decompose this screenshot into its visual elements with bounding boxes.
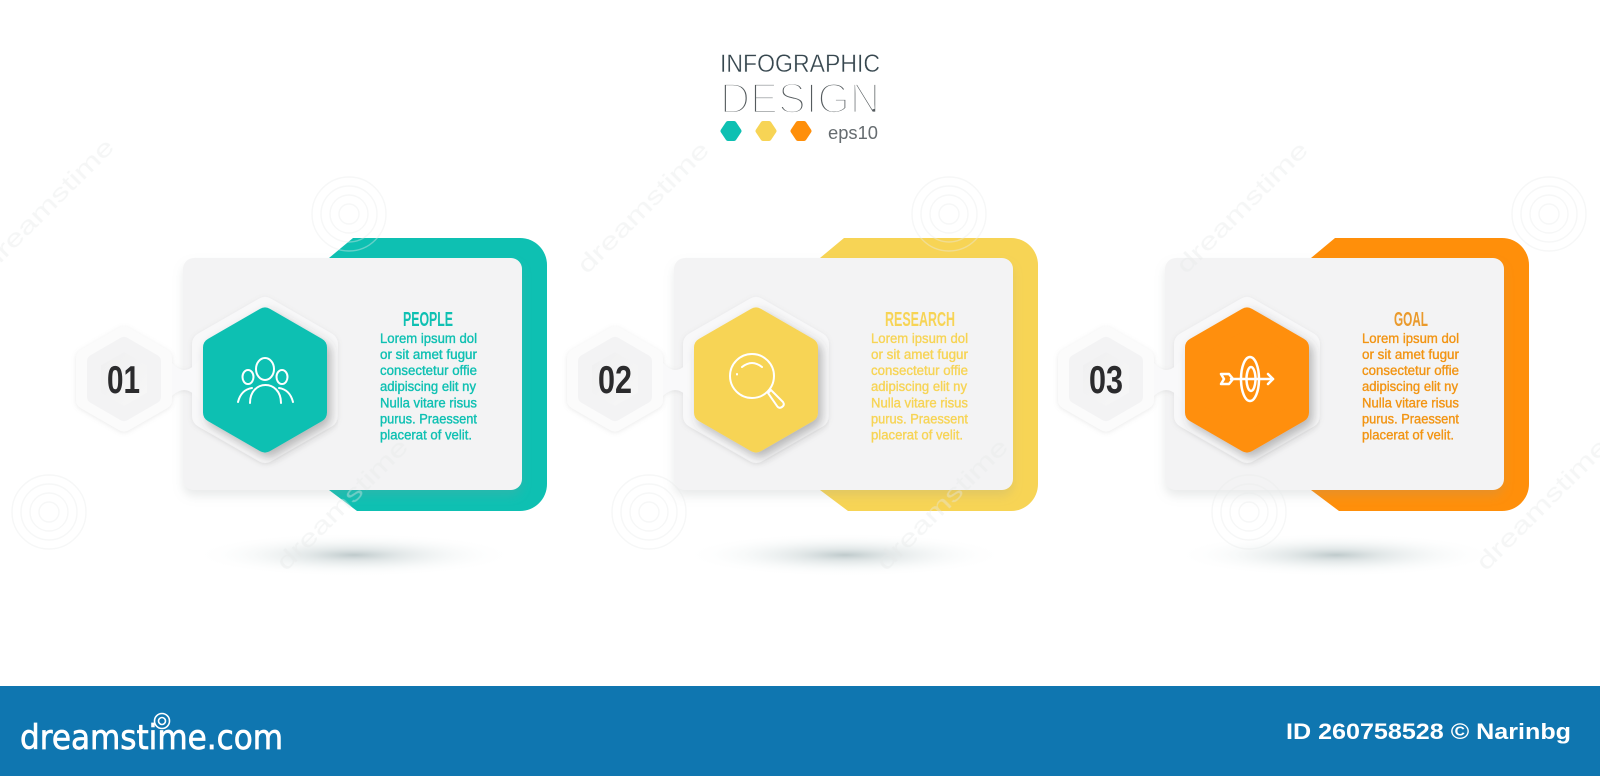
watermark: [0, 133, 1600, 576]
panel: research: [577, 238, 1038, 577]
body text: purus. Praessent: [380, 412, 477, 426]
number: 03: [1089, 359, 1123, 402]
body text: Nulla vitare risus: [380, 396, 477, 410]
watermark text: [0, 133, 1600, 576]
watermark text: dreamstime: [1471, 433, 1600, 576]
heading: goal: GOAL: [1394, 309, 1428, 331]
logo spiral: [154, 714, 170, 728]
body text: adipiscing elit ny: [1362, 379, 1458, 394]
body text: adipiscing elit ny: [380, 379, 476, 394]
body text: or sit amet fugur: [380, 347, 477, 362]
body text: [871, 331, 968, 442]
watermark text: dreamstime: [1171, 136, 1314, 279]
heading: people: PEOPLE: [403, 309, 453, 331]
orange hexagon: [1195, 318, 1299, 442]
image id and credit: ID 260758528 © Narinbg: [1286, 719, 1571, 744]
heading: research: RESEARCH: [885, 309, 955, 331]
body text: consectetur offie: [871, 363, 968, 378]
watermark text: dreamstime: [271, 433, 414, 576]
connector ring: [1068, 309, 1308, 451]
body text: Lorem ipsum dol: [380, 331, 477, 346]
body text: Nulla vitare risus: [871, 396, 968, 410]
body text: Nulla vitare risus: [1362, 396, 1459, 410]
number hexagon: [94, 344, 154, 414]
heading: infographic: INFOGRAPHIC: [720, 50, 880, 78]
body text: or sit amet fugur: [1362, 347, 1459, 362]
panel: people: [86, 238, 547, 577]
icon: target with arrow: [1221, 357, 1273, 401]
floor shadow: [192, 533, 516, 577]
body text: Lorem ipsum dol: [1362, 331, 1459, 346]
body text: purus. Praessent: [1362, 412, 1459, 426]
footer background: [0, 686, 1600, 776]
body text: Lorem ipsum dol: [871, 331, 968, 346]
body text: or sit amet fugur: [871, 347, 968, 362]
card: [1165, 258, 1504, 490]
body text: placerat of velit.: [1362, 428, 1454, 442]
body text: consectetur offie: [380, 363, 477, 378]
connector ring: [86, 309, 326, 451]
hexagon dot: teal: [723, 124, 739, 138]
watermark text: dreamstime: [572, 136, 715, 279]
body text: consectetur offie: [1362, 363, 1459, 378]
orange back shape: [1311, 238, 1529, 511]
title block: [720, 50, 880, 143]
hexagon dot: yellow: [758, 124, 774, 138]
icon: people: [238, 358, 293, 403]
number: 01: [107, 359, 140, 402]
footer bar: [0, 686, 1600, 776]
teal hexagon: [213, 318, 317, 442]
body text: placerat of velit.: [871, 428, 963, 442]
eps10 label: eps10: [828, 123, 878, 143]
number hexagon: [585, 344, 645, 414]
floor shadow: [683, 533, 1007, 577]
card: [674, 258, 1013, 490]
watermark text: dreamstime: [871, 433, 1014, 576]
hexagon dot: orange: [793, 124, 809, 138]
panel: goal: [1068, 238, 1529, 577]
body text: adipiscing elit ny: [871, 379, 967, 394]
number: 02: [598, 359, 632, 402]
icon: magnifier: [730, 354, 784, 408]
body text: [1362, 331, 1459, 442]
teal back shape: [329, 238, 547, 511]
dreamstime logo text: dreamstime.com: [20, 718, 283, 758]
connector ring: [577, 309, 817, 451]
card: [183, 258, 522, 490]
yellow hexagon: [704, 318, 808, 442]
number hexagon: [1076, 344, 1136, 414]
floor shadow: [1174, 533, 1498, 577]
body text: [380, 331, 477, 442]
yellow back shape: [820, 238, 1038, 511]
watermark spirals: [12, 177, 1586, 549]
heading: design: DESIGN: [720, 75, 880, 123]
body text: placerat of velit.: [380, 428, 472, 442]
body text: purus. Praessent: [871, 412, 968, 426]
